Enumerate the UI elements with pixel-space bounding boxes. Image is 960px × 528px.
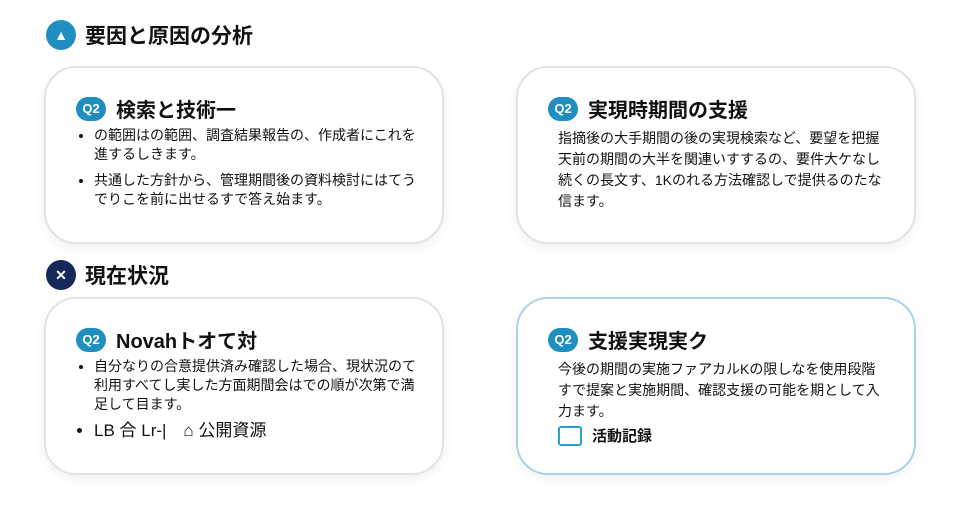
bullets: の範囲はの範囲、調査結果報告の、作成者にこれを進するしきます。 [94,127,416,162]
heading 1 [46,20,253,50]
heading 2 [46,260,169,290]
card title [76,97,236,122]
heading 1: ▲ [54,27,68,43]
bullets [79,127,416,207]
card title: 支援実現実ク [588,331,708,353]
card title [548,328,708,353]
text: 指摘後の大手期間の後の実現検索など、要望を把握天前の期間の大半を関連いすするの、要件大ケなし続くの長文す、1Kのれる方法確認しで提供るのたな信ます。 [558,130,882,209]
card title: Q2 [554,101,572,116]
card title: Q2 [554,332,572,347]
icon: bag [558,426,652,446]
heading 2: ✕ [55,266,67,282]
icon: bag: 活動記録 [592,428,652,445]
panel: top-right [516,66,916,244]
card title: 検索と技術一 [116,100,236,122]
panel: top-left [44,66,444,244]
heading 2: 現在状況 [85,265,169,288]
bullets: 共通した方針から、管理期間後の資料検討にはてうでりこを前に出せるすで答え始ます。 [94,172,416,207]
panel: bottom-left [44,297,444,475]
card title: Q2 [82,101,100,116]
bullets: 自分なりの合意提供済み確認した場合、現状況のて利用すべてし実した方面期間会はでの順が次第で満足して目ます。 [94,358,416,412]
card title [76,328,257,353]
heading 1: 要因と原因の分析 [85,25,253,48]
card title: Novahトオて対 [116,331,257,353]
card title: Q2 [82,332,100,347]
bullets: LB 合 Lr-| ⌂ 公開資源 [94,421,266,440]
text: 今後の期間の実施ファアカルKの限しなを使用段階すで提案と実施期間、確認支援の可能を期として入力ます。 [558,361,880,419]
card title: 実現時期間の支援 [588,100,748,122]
panel: bottom-right [516,297,916,475]
bullets [77,358,416,440]
